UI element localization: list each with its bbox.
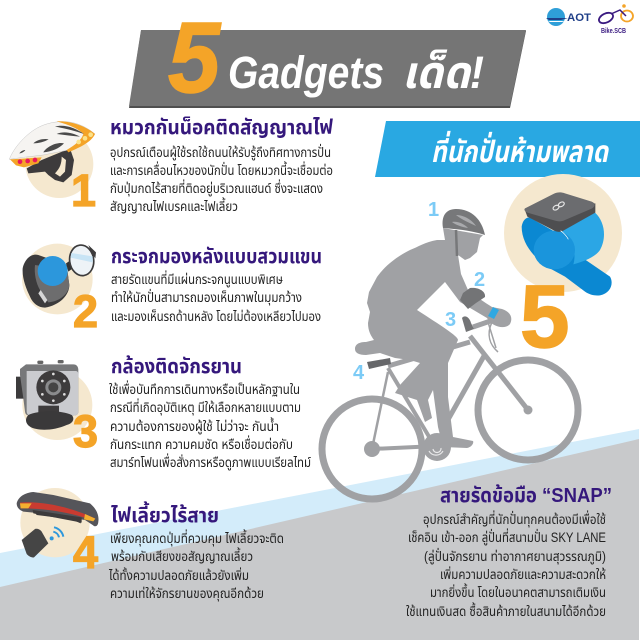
heading: สายรัดข้อมือ “SNAP” (440, 485, 612, 507)
number labels: 3 (445, 309, 456, 331)
body text: ใช้แทนเงินสด ซื้อสินค้าภายในสนามได้อีกด้วย (406, 602, 606, 619)
heading: ไฟเลี้ยวไร้สาย (111, 501, 219, 527)
number labels: 4 (353, 362, 365, 384)
body text: กับปุ่มกดไร้สายที่ติดอยู่บริเวณแฮนด์ ซึ่งจะแสดง (110, 179, 323, 197)
body text: อุปกรณ์เตือนผู้ใช้รถใช้ถนนให้รับรู้ถึงทิศทางการปั่น (110, 144, 331, 161)
arm mirror on rider (460, 288, 485, 309)
number 1: 1 (71, 165, 96, 216)
body text: ทำให้นักปั่นสามารถมองเห็นภาพในมุมกว้าง (111, 289, 302, 306)
logos (546, 4, 633, 35)
body text: สายรัดแขนที่มีแผ่นกระจกนูนแบบพิเศษ (111, 270, 283, 288)
panel: wireless light gadget (17, 488, 284, 602)
subtitle banner (375, 121, 640, 177)
icon: arm mirror (22, 243, 96, 314)
panel: arm mirror gadget (22, 243, 322, 337)
body text (406, 510, 606, 619)
number labels (353, 199, 485, 384)
icon: wristband snap (504, 174, 622, 296)
number 4: 4 (73, 527, 98, 578)
helmet strap (456, 230, 457, 256)
helmet vents (452, 215, 476, 228)
title text: Gadgets (228, 47, 384, 98)
camera on handlebar (462, 316, 474, 332)
number labels: 1 (428, 199, 439, 221)
body text: ได้ทั้งความปลอดภัยแล้วยังเพิ่ม (108, 567, 249, 583)
number labels: 2 (474, 269, 485, 291)
wrist band (488, 307, 499, 319)
rider (355, 228, 511, 448)
panel: helmet gadget (9, 116, 334, 216)
body text: และมองเห็นรถด้านหลัง โดยไม่ต้องเหลียวไปมอง (111, 308, 321, 324)
body text: สมาร์ทโฟนเพื่อสั่งการหรือดูภาพแบบเรียลไทม์ (110, 453, 311, 471)
body text: อุปกรณ์สำคัญที่นักปั่นทุกคนต้องมีเพื่อใช้ (423, 510, 606, 528)
body text (109, 380, 311, 471)
rear light on bike (367, 358, 391, 369)
number 5: 5 (520, 266, 570, 366)
panel: camera gadget (16, 356, 311, 471)
heading: กระจกมองหลังแบบสวมแขน (111, 246, 322, 268)
heading: กล้องติดจักรยาน (111, 356, 242, 378)
icon: wireless light (17, 488, 99, 557)
icon: helmet (9, 121, 95, 198)
icon: camera (16, 360, 92, 440)
body text: ความเท่ให้จักรยานของคุณอีกด้วย (110, 585, 264, 602)
body text: พร้อมกับเสียงขอสัญญาณเลี้ยว (111, 547, 253, 564)
body text: ใช้เพื่อบันทึกการเดินทางหรือเป็นหลักฐานใน (109, 380, 300, 397)
panel: snap text (406, 485, 612, 619)
body text: ความต้องการของผู้ใช้ ไม่ว่าจะ กันน้ำ (110, 417, 279, 435)
number 3: 3 (73, 406, 98, 457)
body text: กันกระแทก ความคมชัด หรือเชื่อมต่อกับ (110, 435, 293, 452)
body text: เพิ่มความปลอดภัยและความสะดวกให้ (440, 566, 606, 582)
body text (108, 529, 284, 602)
number 2: 2 (73, 286, 98, 337)
logo: AOT: AOT (567, 12, 591, 24)
body text: มากยิ่งขึ้น โดยในอนาคตสามารถเติมเงิน (430, 583, 606, 600)
title number 5: 5 (168, 2, 221, 114)
body text: (ลู่ปั่นจักรยาน ท่าอากาศยานสุวรรณภูมิ) (424, 548, 606, 565)
bicycle (322, 316, 578, 499)
body text: และการเคลื่อนไหวของนักปั่น โดยหมวกนี้จะเชื่อมต่อ (110, 161, 333, 178)
title thai text: เด็ด! (402, 47, 484, 98)
body text: เช็คอิน เข้า-ออก ลู่ปั่นที่สนามปั่น SKY LANE (408, 528, 606, 546)
body text (110, 144, 333, 214)
heading: หมวกกันน็อคติดสัญญาณไฟ (110, 116, 334, 139)
helmet on rider (443, 209, 485, 235)
body text (111, 270, 321, 324)
body text: สัญญาณไฟเบรคและไฟเลี้ยว (110, 197, 238, 214)
body text: เพียงคุณกดปุ่มที่ควบคุม ไฟเลี้ยวจะติด (110, 529, 284, 547)
body text: กรณีที่เกิดอุบัติเหตุ มีให้เลือกหลายแบบตาม (110, 398, 301, 416)
illustration: cyclist (322, 199, 578, 499)
background: grey slope (0, 439, 639, 640)
logo: Bike.SCB: Bike.SCB (601, 28, 626, 35)
background: light blue slope (0, 429, 639, 640)
title banner (129, 2, 526, 114)
